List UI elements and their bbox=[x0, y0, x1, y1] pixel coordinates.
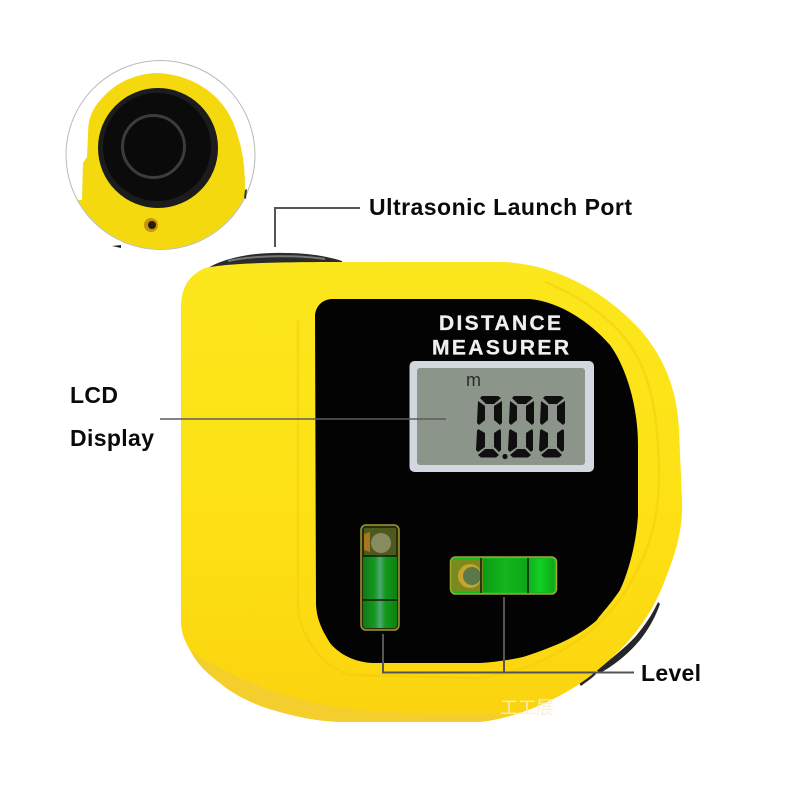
decimal point bbox=[502, 454, 508, 459]
panel title: distance measurer bbox=[432, 312, 569, 360]
horizontal spirit level bbox=[450, 557, 556, 594]
unit label: m bbox=[466, 370, 481, 390]
dark top of port bbox=[205, 253, 342, 275]
black port ring bbox=[98, 88, 218, 208]
LCD leader line bbox=[160, 418, 446, 420]
panel title: distance measurer: MEASURER bbox=[432, 336, 569, 360]
panel title: distance measurer: DISTANCE bbox=[439, 312, 561, 335]
watermark: 工工展 bbox=[500, 698, 554, 718]
LCD screen bbox=[160, 361, 594, 472]
contour lines on shell bbox=[298, 282, 659, 678]
black front panel bbox=[315, 299, 638, 663]
bubble bbox=[371, 533, 391, 553]
label: level: Level bbox=[641, 660, 701, 686]
label: LCD display: Display bbox=[70, 425, 154, 451]
yellow shell bbox=[181, 262, 682, 722]
vertical spirit level bbox=[361, 525, 399, 630]
screw hole bbox=[144, 218, 158, 232]
leader line: ultrasonic port bbox=[275, 208, 360, 247]
label: LCD display bbox=[70, 382, 154, 451]
label: ultrasonic launch port: Ultrasonic Launch Port bbox=[369, 194, 632, 220]
infographic: ultrasonic distance measurer bbox=[66, 60, 700, 722]
leader line: level bbox=[383, 597, 634, 672]
inset: close-up of ultrasonic port bbox=[66, 60, 256, 250]
digit readout 0.00 bbox=[476, 396, 565, 459]
bubble bbox=[458, 564, 482, 588]
lower shell shading bbox=[190, 650, 520, 722]
digit 1 bbox=[476, 396, 502, 458]
rear dark edge bbox=[579, 602, 660, 686]
device body bbox=[181, 253, 682, 722]
label: LCD display: LCD bbox=[70, 382, 118, 408]
